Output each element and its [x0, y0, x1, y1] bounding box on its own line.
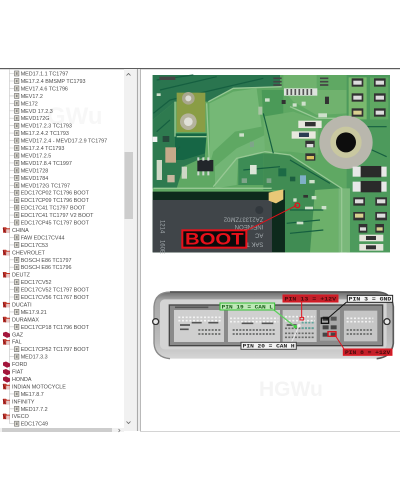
- tree row labels: MEV17.2: [21, 94, 43, 100]
- tree row labels: FIAT: [12, 370, 24, 376]
- vertical scrollbar: [124, 69, 136, 431]
- tree row labels: EDC17CV56 TC1767 BOOT: [21, 295, 90, 301]
- ECU chip: INFINEON: [235, 223, 263, 229]
- ECU chip: 1214: [159, 220, 165, 234]
- tree row labels: MEVD17.2.3 TC1793: [21, 124, 72, 130]
- small board details: [157, 77, 329, 224]
- tree row labels: MEVD 17.2.3: [21, 109, 53, 115]
- tree row labels: EDC17C41 TC1797 V2 BOOT: [21, 213, 94, 219]
- tree row labels: EDC17CP45 TC1797 BOOT: [21, 220, 90, 226]
- tree row labels: FAW EDC17CV44: [21, 235, 65, 241]
- tree row labels: EDC17C53: [21, 243, 48, 249]
- diagram: ECU connector pinout: [153, 292, 393, 359]
- tree row labels: ME172: [21, 101, 38, 107]
- tree row labels: DUCATI: [12, 302, 32, 308]
- tree row labels: MEV17.4.6 TC1796: [21, 86, 68, 92]
- tree row labels: MEVD17.8.4 TC1997: [21, 161, 72, 167]
- tree row labels: MED17.1.1 TC1797: [21, 72, 68, 78]
- label: PIN 8 = +12V: PIN 8 = +12V: [345, 349, 391, 356]
- ECU chip: SAK TC1797: [228, 241, 263, 247]
- tree row labels: EDC17CP18 TC1796 BOOT: [21, 325, 90, 331]
- tree row labels: INFINITY: [12, 399, 35, 405]
- panel: file tree: [3, 69, 107, 428]
- tree row labels: FAL: [12, 340, 22, 346]
- callout: BOOT: [182, 203, 300, 248]
- tree row labels: EDC17CV52 TC1797 BOOT: [21, 288, 90, 294]
- tree row labels: INDIAN MOTOCYCLE: [12, 384, 66, 390]
- tree row labels: MEVD172G: [21, 116, 49, 122]
- tree row labels: EDC17CV52: [21, 280, 52, 286]
- tree row labels: BOSCH E86 TC1796: [21, 265, 72, 271]
- tree row labels: MEVD17.2.4 - MEVD17.2.9 TC1797: [21, 139, 107, 145]
- tree row labels: EDC17CP52 TC1797 BOOT: [21, 347, 90, 353]
- connector blocks: [174, 307, 377, 342]
- tree row labels: EDC17CP09 TC1796 BOOT: [21, 198, 90, 204]
- label: PIN 13 = +12V: PIN 13 = +12V: [284, 295, 337, 302]
- tree connector lines: [10, 69, 14, 424]
- tree row labels: GAZ: [12, 332, 24, 338]
- mounting hole: [319, 116, 373, 169]
- tree row labels: ME17.9.21: [21, 310, 47, 316]
- window frame: [0, 68, 400, 432]
- tree row labels: MED17.3.3: [21, 355, 48, 361]
- tree row labels: ME17.2.4.2 TC1793: [21, 131, 69, 137]
- tree row icons: [3, 71, 19, 426]
- tree row labels: MEVD172G TC1797: [21, 183, 70, 189]
- tree row labels: DURAMAX: [12, 317, 39, 323]
- label: PIN 3 = GND: PIN 3 = GND: [349, 296, 392, 303]
- mounting ears: [153, 319, 390, 325]
- ECU chip: AC: [254, 231, 263, 237]
- ECU chip: 160E: [159, 240, 165, 254]
- label: PIN 19 = CAN L: PIN 19 = CAN L: [222, 303, 274, 310]
- SMD components: [153, 78, 387, 251]
- tree row labels: EDC17CP02 TC1796 BOOT: [21, 191, 90, 197]
- tree row labels: IVECO: [12, 414, 29, 420]
- ECU housing: [154, 292, 393, 359]
- callout: BOOT: BOOT: [185, 229, 244, 248]
- tree row labels: ME17.8.7: [21, 392, 44, 398]
- tree row labels: MEVD17.2.5: [21, 154, 51, 160]
- tree row labels: CHINA: [12, 228, 29, 234]
- watermark: tree: GWu: [47, 103, 103, 130]
- horizontal scrollbar: [0, 428, 124, 432]
- ECU chip: ZA21337ZM02: [223, 216, 263, 222]
- tree row labels: [12, 72, 107, 428]
- tree row labels: ME17.2.4 TC1793: [21, 146, 64, 152]
- watermark: diagram: HGWu: [259, 378, 323, 401]
- tree row labels: MEVD1784: [21, 176, 48, 182]
- board surface: [153, 75, 390, 252]
- standoff screws: [177, 92, 205, 132]
- tree row labels: MEVD1728: [21, 168, 48, 174]
- tree row labels: HONDA: [12, 377, 32, 383]
- photo: PCB with boot point: [153, 75, 390, 254]
- tree row labels: EDC17C49: [21, 422, 48, 428]
- tree row labels: DEUTZ: [12, 273, 31, 279]
- tree row labels: CHEVROLET: [12, 250, 46, 256]
- tree row labels: MED17.7.2: [21, 407, 48, 413]
- tree row labels: FORD: [12, 362, 27, 368]
- tree row labels: EDC17C41 TC1797 BOOT: [21, 206, 86, 212]
- ECU chip: [153, 189, 285, 254]
- tree row labels: ME17.2.4 BMSMP TC1793: [21, 79, 86, 85]
- tree row labels: BOSCH E86 TC1797: [21, 258, 72, 264]
- label: PIN 20 = CAN H: PIN 20 = CAN H: [243, 343, 295, 350]
- pin markers and leaders: [274, 302, 347, 349]
